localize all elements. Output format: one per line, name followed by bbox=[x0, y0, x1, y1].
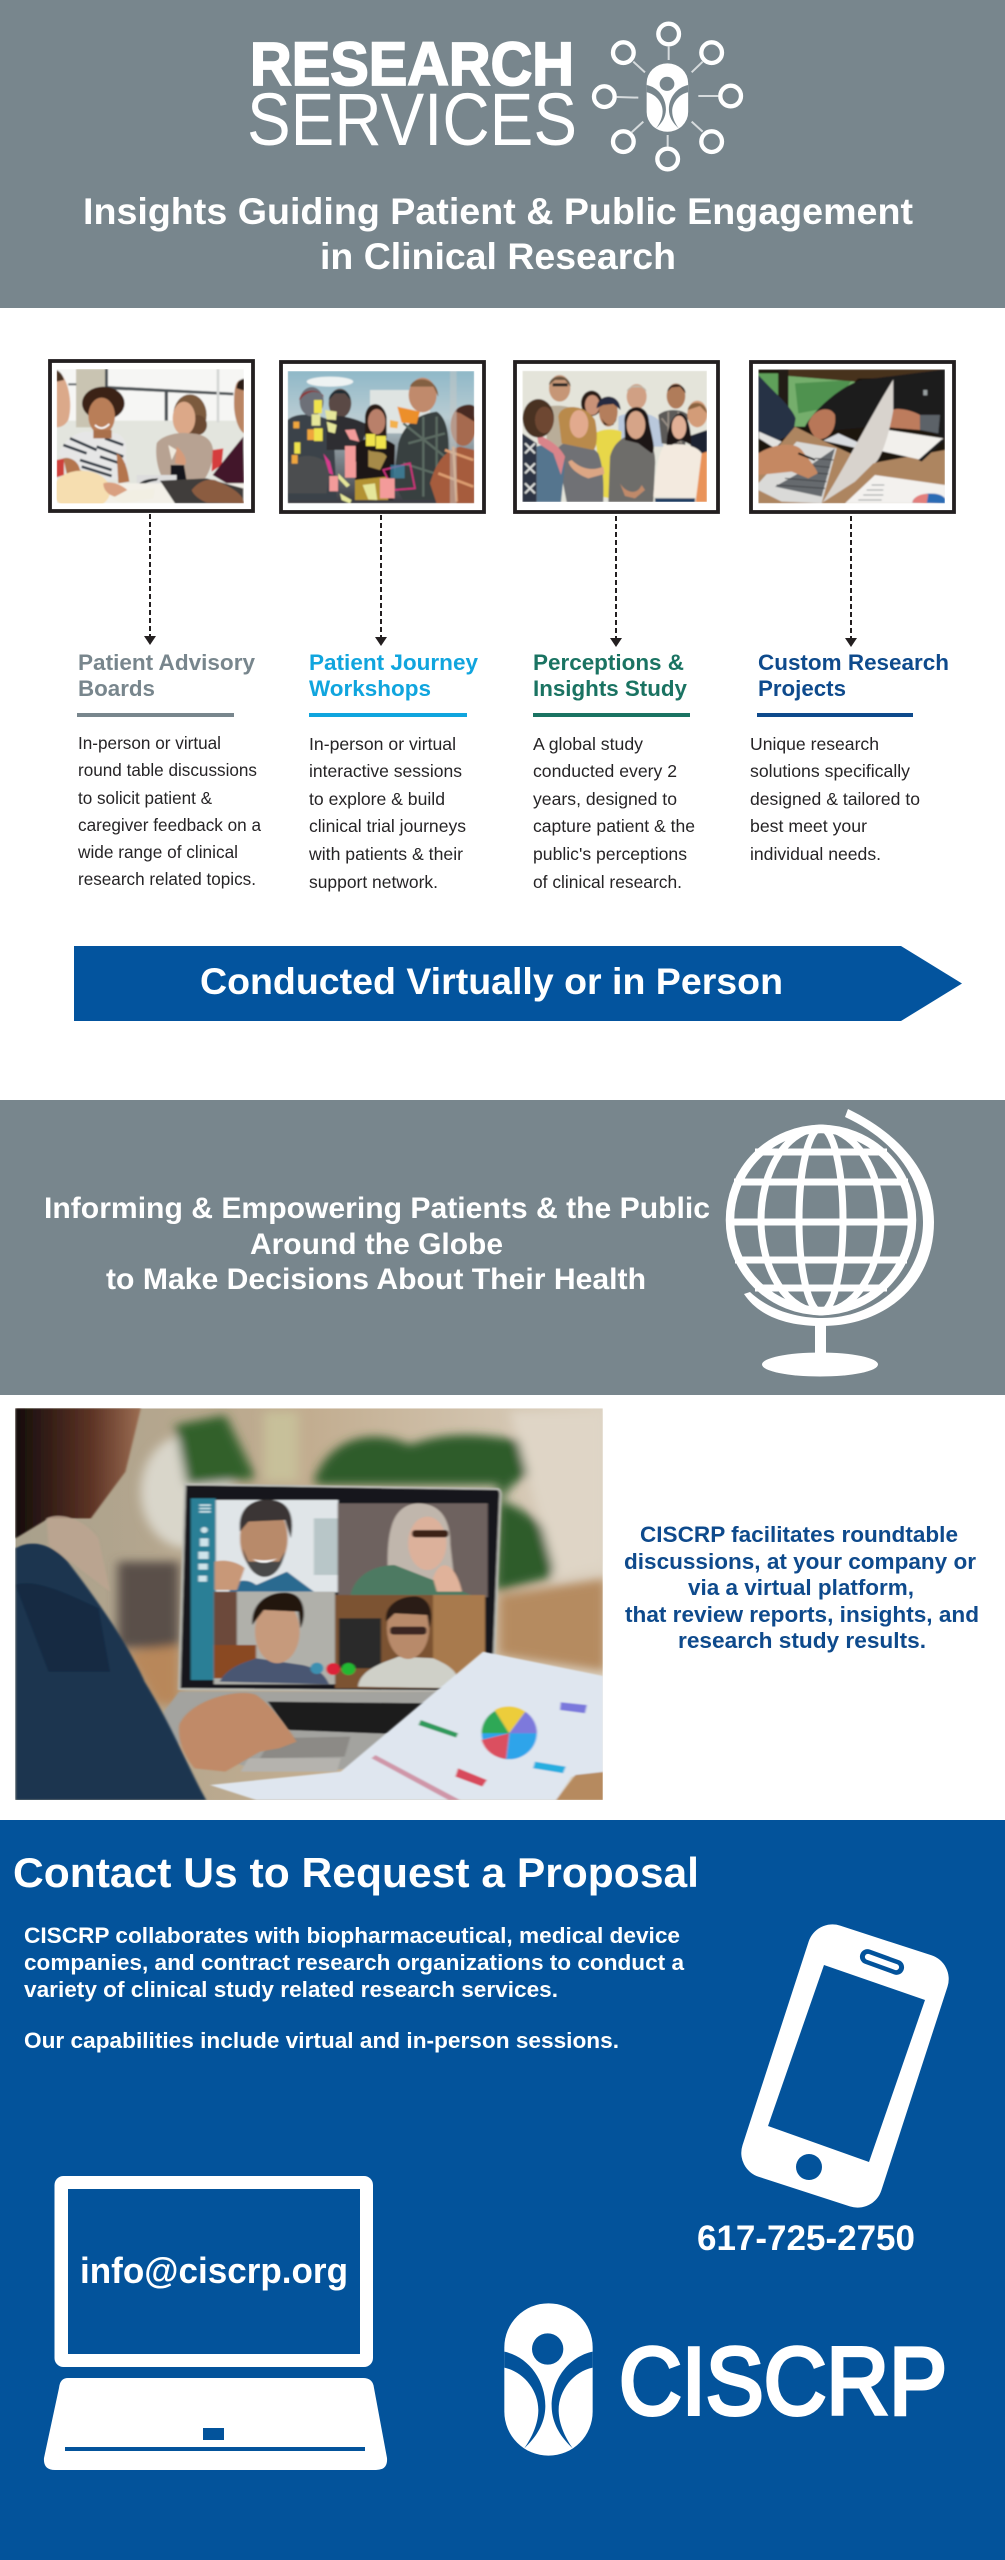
text block: roundtable description: research study results. bbox=[678, 1628, 926, 1653]
photo: custom research laptop bbox=[751, 362, 954, 512]
panel: contact section bbox=[0, 1820, 1005, 2560]
panel: photo frames row bbox=[50, 361, 954, 512]
panel: Patient Journey Workshops: to explore & build bbox=[309, 789, 445, 809]
panel: Patient Advisory Boards: round table discussions bbox=[78, 760, 257, 780]
panel: Patient Advisory Boards: Boards bbox=[78, 676, 155, 701]
photo sub-element: person in foreground bbox=[15, 1408, 297, 1800]
icon: smartphone bbox=[735, 1918, 955, 2214]
title bbox=[83, 191, 913, 277]
panel: Patient Journey Workshops: with patients & their bbox=[308, 844, 463, 864]
photo: patient advisory board meeting bbox=[50, 361, 253, 511]
text block: roundtable description: discussions, at your company or bbox=[624, 1549, 976, 1574]
panel: Perceptions & Insights Study: years, designed to bbox=[533, 789, 677, 809]
icon: laptop with email bbox=[44, 2176, 387, 2470]
panel: Custom Research Projects: best meet your bbox=[750, 816, 867, 836]
panel: Patient Advisory Boards: In-person or virtual bbox=[78, 733, 221, 753]
panel: Perceptions & Insights Study: conducted every 2 bbox=[533, 761, 677, 781]
arrow banner: Conducted Virtually or in Person bbox=[74, 946, 962, 1021]
panel: Patient Journey Workshops: interactive sessions bbox=[309, 761, 462, 781]
title: Insights Guiding Patient & Public Engagement bbox=[83, 191, 913, 232]
panel: Patient Advisory Boards: caregiver feedback on a bbox=[78, 815, 261, 835]
panel: Custom Research Projects: Unique research bbox=[750, 734, 879, 754]
panel: Perceptions & Insights Study bbox=[533, 650, 695, 892]
panel: Patient Journey Workshops: Patient Journey bbox=[309, 650, 478, 675]
panel: Patient Journey Workshops: clinical trial journeys bbox=[309, 816, 466, 836]
text: email address: info@ciscrp.org bbox=[80, 2250, 348, 2291]
panel: Patient Advisory Boards: wide range of clinical bbox=[77, 842, 238, 862]
panel: Patient Advisory Boards: Patient Advisory bbox=[78, 650, 255, 675]
heading: informing and empowering bbox=[44, 1192, 710, 1296]
icon: globe bbox=[726, 1109, 934, 1376]
logo wordmark: Research Services: SERVICES bbox=[247, 78, 577, 161]
panel: Perceptions & Insights Study: of clinical research. bbox=[533, 872, 682, 892]
panel: Patient Advisory Boards: to solicit patient & bbox=[78, 788, 212, 808]
logo wordmark: Research Services bbox=[247, 30, 577, 161]
heading: contact us: Contact Us to Request a Proposal bbox=[13, 1849, 699, 1896]
text block: collaborations: CISCRP collaborates with biopharmaceutical, medical device bbox=[24, 1923, 680, 1948]
photo sub-element: laptop lid bbox=[179, 1484, 501, 1692]
title: in Clinical Research bbox=[320, 236, 676, 277]
logo wordmark: Research Services: RESEARCH bbox=[250, 30, 574, 98]
panel: Perceptions & Insights Study: public's perceptions bbox=[533, 844, 687, 864]
panel: Perceptions & Insights Study: capture patient & the bbox=[533, 816, 695, 836]
photo: video conference on laptop bbox=[15, 1408, 606, 1800]
panel: Patient Journey Workshops: Workshops bbox=[309, 676, 431, 701]
panel: Perceptions & Insights Study: Perceptions & bbox=[533, 650, 684, 675]
text block: roundtable description: via a virtual platform, bbox=[688, 1575, 914, 1600]
logo: CISCRP: CISCRP bbox=[619, 2328, 947, 2435]
arrow: photo 3 to column 3 bbox=[610, 516, 622, 647]
text block: roundtable description: CISCRP facilitates roundtable bbox=[640, 1522, 958, 1547]
text block: collaborations: variety of clinical study related research services. bbox=[24, 1977, 558, 2002]
photo sub-element: laptop base and keyboard bbox=[164, 1691, 436, 1772]
text block: collaborations: Our capabilities include virtual and in-person sessions. bbox=[24, 2028, 619, 2053]
panel: Custom Research Projects: designed & tailored to bbox=[750, 789, 920, 809]
panel: informing band bbox=[0, 1100, 1005, 1395]
icon: research network logo bbox=[594, 24, 741, 169]
panel: Custom Research Projects: Projects bbox=[758, 676, 846, 701]
arrow banner: Conducted Virtually or in Person: Conducted Virtually or in Person bbox=[200, 960, 783, 1002]
heading: informing and empowering: Around the Globe bbox=[250, 1228, 503, 1261]
panel: Patient Advisory Boards bbox=[77, 650, 261, 889]
panel: Custom Research Projects: individual needs. bbox=[750, 844, 881, 864]
arrow: photo 4 to column 4 bbox=[845, 516, 857, 647]
panel: Patient Advisory Boards: research related topics. bbox=[78, 869, 256, 889]
panel: Custom Research Projects bbox=[750, 650, 949, 864]
panel: Custom Research Projects: solutions specifically bbox=[750, 761, 910, 781]
heading: informing and empowering: to Make Decisions About Their Health bbox=[106, 1263, 646, 1296]
text block: roundtable description: that review reports, insights, and bbox=[625, 1602, 979, 1627]
text block: collaborations: companies, and contract research organizations to conduct a bbox=[24, 1950, 684, 1975]
logo: CISCRP bbox=[504, 2303, 947, 2456]
arrow: photo 1 to column 1 bbox=[144, 514, 156, 645]
text block: roundtable description bbox=[624, 1522, 979, 1653]
panel: header band bbox=[0, 0, 1005, 308]
arrow: photo 2 to column 2 bbox=[375, 515, 387, 646]
panel: Patient Journey Workshops: In-person or virtual bbox=[309, 734, 456, 754]
panel: Custom Research Projects: Custom Research bbox=[758, 650, 949, 675]
heading: informing and empowering: Informing & Empowering Patients & the Public bbox=[44, 1192, 710, 1225]
panel: Perceptions & Insights Study: A global study bbox=[533, 734, 643, 754]
photo: patient journey workshop bbox=[281, 362, 484, 512]
panel: Patient Journey Workshops: support network. bbox=[309, 872, 438, 892]
panel: Patient Journey Workshops bbox=[308, 650, 478, 892]
text: phone number: 617-725-2750 bbox=[697, 2219, 915, 2258]
photo: perceptions group portrait bbox=[515, 362, 718, 512]
text block: collaborations bbox=[24, 1923, 684, 2053]
panel: Perceptions & Insights Study: Insights Study bbox=[533, 676, 687, 701]
photo sub-element: document with pie chart bbox=[210, 1652, 606, 1800]
